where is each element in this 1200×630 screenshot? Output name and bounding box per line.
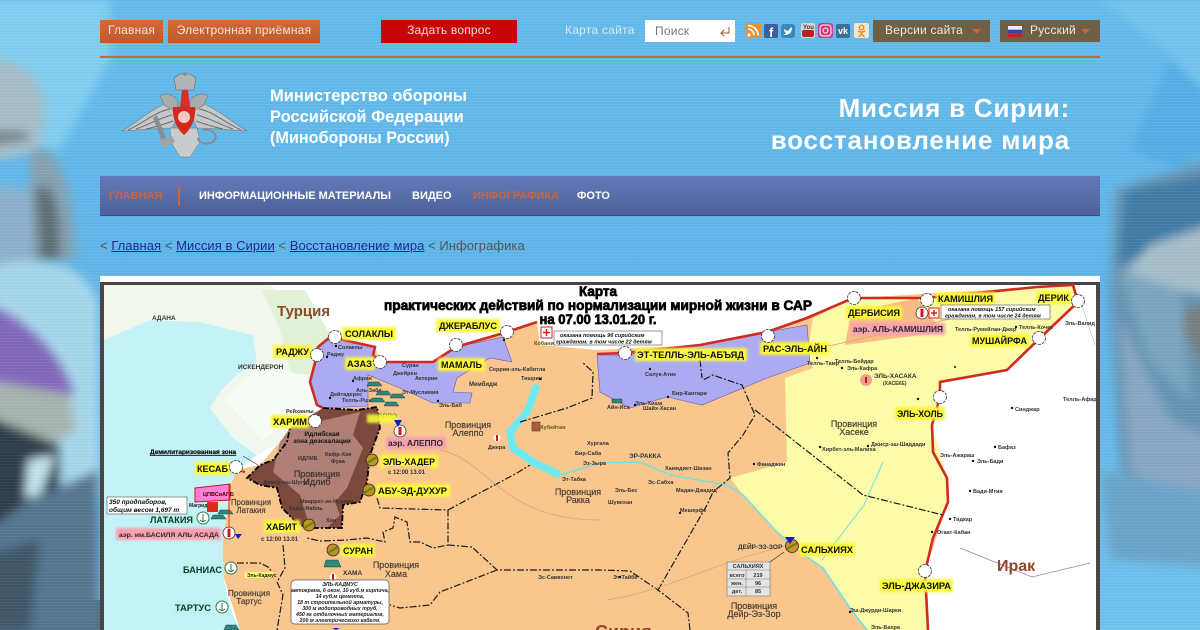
port labels: ЛАТАКИЯ [150,514,193,525]
man on right [1110,150,1200,560]
button: Главная [100,20,163,43]
dropdown: Русский: Русский [1030,23,1076,37]
small town labels: Хургала [587,441,610,447]
country label: Ирак: Ирак [997,558,1036,575]
small town labels: Африн [353,375,372,382]
icon: instagram [818,23,833,38]
small town labels: Хубейтан [540,424,566,431]
heading: ministry name [270,87,467,147]
Kadmus aid callout: 18 т строительной арматуры, [297,599,383,606]
Kadmus aid callout: автокрана, 6 окон, 10 куб.м кирпича, [291,587,390,594]
yellow labels: РАС-ЭЛЬ-АЙН [763,343,827,354]
town dots [326,326,1017,613]
yellow labels: АЗАЗ [347,358,372,369]
small town labels: ЭЛЬ-ХАСАКА [874,373,917,380]
province labels: Провинция [445,420,491,430]
province labels: Хасеке [839,427,869,437]
note: date labels: с 12:00 13.01 [261,537,299,543]
Kadmus aid callout: 300 м водопроводных труб, [302,605,378,612]
small town labels: Вади-Мтия [973,489,1003,495]
airbase markers [223,307,928,539]
airbase labels: аэр. АЛЬ-КАМИШЛИЯ [853,324,943,334]
button: Задать вопрос [381,20,517,43]
small town labels: ИДЛИБ [298,456,318,462]
small town labels: Синджар [1015,407,1040,413]
small town labels: Телль-Афар [1063,396,1097,403]
aid icons [541,308,939,338]
search box: Поиск [655,24,689,38]
small town labels: Аль-Заба [356,387,383,394]
small town labels: Телль-Тамр [807,361,840,367]
link: Карта сайта: Карта сайта [565,23,635,37]
small town labels: АЛЕППО [369,413,397,420]
country label: Турция: Турция [277,303,330,320]
humanitarian box: Latakia: 350 продпаборов, [109,498,167,506]
veil and woman [0,261,100,500]
Salkhiyah table: всего [730,573,745,579]
port labels [148,513,224,614]
yellow labels: ЭТ-ТЕЛЛЬ-ЭЛЬ-АБЪЯД [637,349,744,360]
province labels: Провинция [731,601,777,611]
port labels: БАНИАС [183,564,222,575]
blue zone west [310,337,512,408]
nav: ВИДЕО: ВИДЕО [412,190,452,202]
province labels: Провинция [294,469,340,479]
tanks [211,382,622,630]
aid box: Qamishli [941,305,1050,320]
aid box: Kobani [554,331,662,346]
yellow labels: ДЕРИК [1038,292,1069,303]
small town labels: ИСКЕНДЕРОН [238,364,284,371]
button: Электронная приёмная [168,20,320,43]
small town labels: Мааррет-эн-Нууман [300,499,354,505]
small town labels: Кобани [534,340,554,347]
airbase labels: аэр. АЛЕППО [388,438,443,448]
small town labels: Бир-Саба [575,450,602,457]
small town labels: Джиср-эш-Шаддади [871,442,925,448]
aid box: Qamishli: оказана помощь 157 сирийским [948,306,1036,313]
small town labels: Эль-Баб [439,402,462,409]
Idlib zone [247,407,380,528]
yellow labels: ХАБИТ [266,521,297,532]
yellow labels: КЕСАБ [197,463,228,474]
small town labels: Бир-Кантари [672,391,707,397]
yellow labels: МУШАЙРФА [972,335,1027,346]
small town labels: Огаат-Кабан [937,529,970,536]
small town labels: Айн-Иса [607,404,631,411]
small town labels: Эш-Джурди-Шарки [850,608,901,614]
map title: на 07.00 13.01.20 г. [540,312,656,327]
small town labels: Раджу [327,352,345,358]
small town labels: Джера [488,445,506,451]
icon: rss [746,23,761,38]
emblem: double-headed eagle [122,72,248,158]
icon: facebook: f [769,25,774,40]
yellow labels: СУРАН [343,545,373,556]
dropdown: Русский [1000,20,1100,42]
checkpoint markers [303,454,798,556]
border crossing circles [230,292,1084,578]
thin tan roads [440,310,990,600]
small town labels: Телль-Кочек [1019,325,1053,331]
nav: ГЛАВНАЯ: ГЛАВНАЯ [109,190,162,202]
map title: практических действий по нормализации мирной жизни в САР [384,298,812,313]
small town labels: Эз-Зыра [583,461,607,467]
Кадмус tag: Эль-Кадмус [247,573,277,579]
small town labels: Хирбет-эль-Малиха [822,446,877,453]
Turkey green land [104,285,330,455]
small town labels: ЭР-РАККА [629,453,662,460]
small town labels: Солакпы [338,345,363,351]
small town labels: Шайх-Хасан [643,405,676,412]
nav: ИНФОРМАЦИОННЫЕ МАТЕРИАЛЫ: ИНФОРМАЦИОННЫЕ МАТЕРИАЛЫ [199,190,391,202]
small town labels: Фуаа [331,459,346,465]
Salkhiyah table: 85 [755,589,761,595]
province labels: Алеппо [452,428,484,438]
Kadmus aid callout [291,580,390,624]
small town labels: Хамидиет-Шизан [665,466,712,472]
heading: mission title [771,93,1070,155]
map panel [100,276,1100,630]
small town labels: Эс-Сабха [648,479,674,486]
blue triangles [235,420,795,630]
zone label: Идлибская зона деэскалации: зона деэскалации [293,438,351,445]
province labels: Провинция [228,589,270,598]
nav: ИНФОГРАФИКА: ИНФОГРАФИКА [473,190,559,202]
small town labels: Тидкар [953,517,973,523]
province labels: Провинция [373,560,419,570]
small town labels: Шувехан [608,500,632,506]
province labels: Тартус [236,597,262,606]
navigation bar [100,176,1100,216]
small town labels: Серрин-эль-Кабитла [489,366,546,373]
yellow labels: ЭЛЬ-ХАДЕР [383,456,435,467]
Kadmus aid callout: 450 кг отделочных материалов, [295,612,384,618]
province labels: Хама [385,569,407,579]
Salkhiyah table [727,552,784,596]
yellow labels [195,291,1071,592]
heading: mission title: восстановление мира [771,125,1070,155]
small town labels: Мембидж [469,381,498,388]
icon: vk: vk [838,26,849,36]
small town labels: Мешерфе [680,507,706,514]
Salkhiyah table: дет. [732,589,743,595]
small town labels: АДАНА [152,315,176,322]
demilitarized zone callout [150,449,258,465]
province labels: Дейр-Эз-Зор [727,609,781,619]
yellow labels: ДЕРБИСИЯ [848,307,900,318]
yellow labels: ЭЛЬ-ХОЛЬ [897,408,943,419]
yellow labels: ЭЛЬ-ДЖАЗИРА [882,580,951,591]
port markers [197,512,237,613]
aid box: Kobani: гражданам, в том числе 22 детям [556,340,652,346]
small town labels: Мадан-Джадид [676,488,717,494]
small town labels: Эль-Валид [1065,321,1095,327]
sea [104,320,257,630]
airbase labels [116,323,945,540]
yellow labels: ХАРИМ [273,416,307,427]
button: Электронная приёмная: Электронная приёмная [177,23,311,37]
small town labels: Актерин [415,376,438,382]
province labels: Провинция [555,487,601,497]
button: Задать вопрос: Задать вопрос [407,23,491,37]
small town labels: Рейханлы [286,408,314,415]
blue zone east [597,325,810,408]
small town labels: Эль-Бес [615,488,637,494]
small town labels: Эт-Табка [562,476,587,483]
small town labels: Эт-Тайбе [613,574,638,581]
demilitarized zone callout: Демилитаризованная зона [150,449,237,456]
province labels [228,419,877,619]
small town labels: Бафаз [998,444,1016,451]
man on left [0,58,45,170]
small town labels: Эль-Ажараш [940,453,975,459]
yellow labels: КАМИШЛИЯ [938,293,993,304]
Magrib aid flag: ЦПВСиАПБ [203,492,234,498]
Salkhiyah table: 219 [753,573,763,579]
dropdown: Версии сайта [873,20,990,42]
small town labels: Дейтадерес [330,391,362,398]
small town labels: ХАМА [343,570,362,577]
small town labels: Эт-Муслимия [402,390,439,396]
icon: odnoklassniki [854,23,869,38]
Qamishli orange patch [845,298,943,345]
small town labels: Суран [402,363,419,369]
small town labels: (ХАСЕКЕ) [883,381,907,387]
button: Главная: Главная [108,23,155,37]
Kadmus aid callout: 14 куб.м цемента, [316,593,365,600]
breadcrumb: < Главная < Миссия в Сирии < Восстановление мира < Инфографика [100,238,525,253]
yellow labels: ДЖЕРАБЛУС [439,320,497,331]
note: date labels: с 12:00 13.01 [388,470,426,476]
Kadmus aid callout: ЭЛЬ-КАДМУС [322,582,358,588]
small town labels: Тишрин [521,376,542,382]
Magrib aid flag: Магрид [189,503,208,509]
note: date labels [259,466,430,543]
small town labels: Телль-Румейлан-Джер [955,326,1017,333]
small town labels: Джиср-эш-Шугур [263,480,310,486]
rivers [510,385,560,475]
small town labels: Эль-Кафра [847,365,878,372]
small town labels: Телль-Ршин [342,398,375,404]
icon: twitter [781,24,795,38]
zone label: Идлибская зона деэскалации [293,430,351,445]
small town labels: Фанаджин [757,462,785,468]
heading: ministry name: Российской Федерации [270,108,464,126]
heading: ministry name: Министерство обороны [270,87,467,105]
province labels: Провинция [831,419,877,429]
icon: youtube: You [803,25,814,31]
aid box: Qamishli: гражданам, в том числе 24 детям [945,314,1041,320]
yellow labels: СОЛАКЛЫ [345,328,393,339]
humanitarian box: Latakia [107,497,187,514]
small town labels: Кафр-Хая [325,451,351,458]
Syria orange [223,285,1080,630]
map title [384,284,812,327]
small town labels: Джейрен [393,370,417,377]
province labels: Провинция [231,498,271,507]
yellow labels: МАМАЛЬ [441,359,482,370]
province labels: Идлиб [303,477,331,487]
humanitarian box: Latakia: общим весом 1,697 т [109,506,179,514]
heading: mission title: Миссия в Сирии: [839,93,1070,123]
port labels: ТАРТУС [175,602,211,613]
heading: ministry name: (Минобороны России) [270,129,450,147]
Salkhiyah table: жен. [730,581,743,587]
social icons [746,23,869,40]
map title: Карта [579,284,618,299]
yellow labels: РАДЖУ [276,346,309,357]
yellow labels: АБУ-ЭД-ДУХУР [378,485,447,496]
province labels: Ракка [566,495,590,505]
Salkhiyah table: 96 [755,581,761,587]
Hasakah yellow zone [730,285,1080,630]
small town labels: Кафр-Набль [289,505,323,512]
nav: ФОТО: ФОТО [577,190,610,202]
aid box: Kobani: оказана помощь 96 сирийским [560,332,645,339]
small town labels [152,315,1097,630]
small town labels: ДЕЙР-ЭЗ-ЗОР [738,542,783,551]
airbase labels: аэр. им.БАСИЛЯ АЛЬ АСАДА [119,532,219,539]
small town labels: Хан [326,518,336,524]
Kadmus aid callout: 200 м электрического кабеля. [299,617,381,624]
small town labels: Эль-Бади [977,459,1003,465]
province labels: Латакия [236,506,266,515]
Salkhiyah table: САЛЬХИЯХ [733,564,764,570]
zone label: Идлибская зона деэскалации: Идлибская [304,430,340,438]
Magrib aid flag [189,484,234,532]
small town labels: Салук-Атик [645,372,676,378]
dropdown: Версии сайта: Версии сайта [885,23,963,37]
small town labels: Эс-Саввхнет [538,575,573,581]
small town labels: Эль-Хиша [635,401,663,407]
province borders [237,360,943,630]
search box [645,20,735,42]
yellow labels: САЛЬХИЯХ [801,544,854,555]
small town labels: Телль-Бейдар [835,358,874,365]
red border [310,322,537,408]
